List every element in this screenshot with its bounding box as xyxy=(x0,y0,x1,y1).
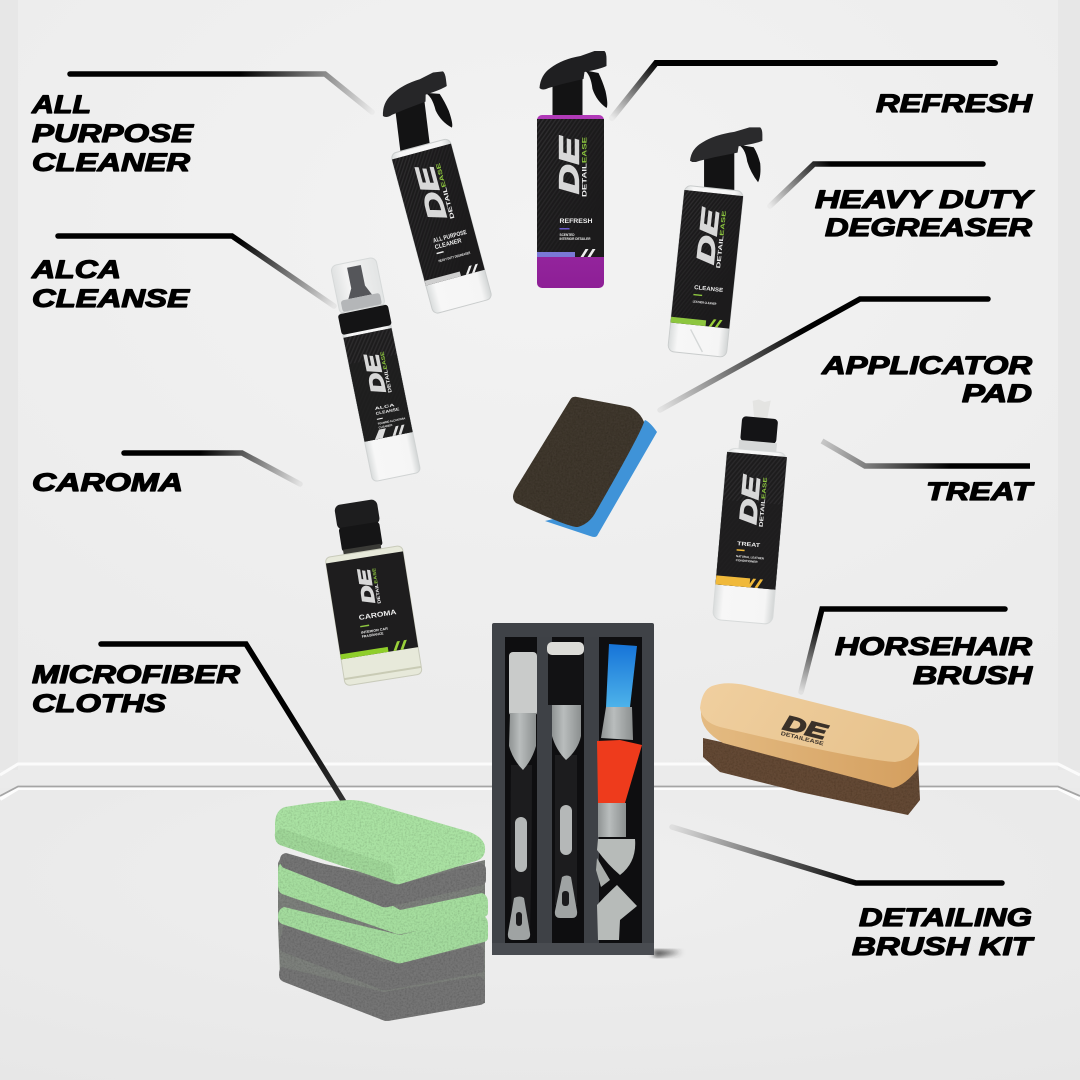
label: heavy duty degreaser: DEGREASER xyxy=(825,214,1032,242)
bottle body: FOAMING ALCANTARA xyxy=(377,416,406,426)
icon: applicator pad xyxy=(513,397,657,537)
icon: spray trigger xyxy=(378,71,455,159)
arrow: horsehair brush leader xyxy=(801,609,1005,692)
label: horsehair brush xyxy=(835,633,1033,690)
bottle body: DETAILEASE xyxy=(582,136,588,197)
cloth: green top xyxy=(275,800,485,884)
bottle body: DETAILEASE xyxy=(716,210,728,269)
label: heavy duty degreaser: HEAVY DUTY xyxy=(815,186,1035,214)
bottle body: DETAILEASE xyxy=(759,477,769,527)
label: alca cleanse: ALCA xyxy=(31,256,121,284)
label: detailing brush kit: BRUSH KIT xyxy=(852,933,1036,961)
bottle body: INTERIOR CAR xyxy=(361,627,389,635)
bottle body: DETAILEASE xyxy=(371,568,382,604)
bottle body: CAROMA xyxy=(358,609,397,622)
arrow: all purpose cleaner leader xyxy=(70,74,372,112)
bottle body xyxy=(668,185,744,357)
bottle body: DETAILEASE xyxy=(379,350,394,393)
bottle body: DE xyxy=(354,567,379,605)
brush three xyxy=(596,644,642,940)
cloth underlay xyxy=(278,855,485,1021)
cap xyxy=(334,499,384,556)
arrow: microfiber cloths leader xyxy=(101,644,344,802)
label: applicator pad: PAD xyxy=(962,380,1032,408)
arrow: applicator pad leader xyxy=(660,299,988,410)
bottle body: NATURAL LEATHER xyxy=(736,554,765,561)
arrow: heavy duty degreaser leader xyxy=(770,164,983,206)
bottle body: CLEANER xyxy=(434,238,463,251)
icon: foam pump dome xyxy=(330,257,385,315)
bottle: alca cleanse xyxy=(328,256,422,482)
bottle body xyxy=(391,138,492,314)
bottle: caroma xyxy=(317,496,422,686)
label: all purpose cleaner xyxy=(31,91,195,177)
label: detailing brush kit: DETAILING xyxy=(859,904,1032,932)
icon: spray trigger xyxy=(690,127,762,198)
cloth: grey fifth xyxy=(280,853,486,907)
bottle body: DE xyxy=(735,474,766,525)
cloth: green fourth xyxy=(278,863,488,934)
icon: microfiber cloths xyxy=(275,800,488,1021)
brush one xyxy=(508,652,537,940)
label: all purpose cleaner: PURPOSE xyxy=(32,120,195,148)
label: horsehair brush: BRUSH xyxy=(913,662,1033,690)
bottle body: CLEANER xyxy=(378,423,393,430)
brush two xyxy=(547,642,584,918)
icon: detailing brush kit xyxy=(492,623,654,955)
label: alca cleanse: CLEANSE xyxy=(32,285,191,313)
bottle body: DE xyxy=(361,351,390,395)
label: refresh: REFRESH xyxy=(876,90,1033,118)
bottle body: DE xyxy=(692,207,725,265)
brush logo: DETAILEASE xyxy=(780,731,825,748)
cap and nozzle xyxy=(738,398,781,453)
bottle body: SCENTED xyxy=(560,233,575,237)
bottle body: ALCA xyxy=(374,402,395,411)
arrow: treat leader xyxy=(822,441,1030,466)
brush logo: DE xyxy=(781,712,830,745)
shadow under kit xyxy=(652,950,682,957)
arrow: detailing brush kit leader xyxy=(672,827,1002,883)
bottle: treat xyxy=(712,397,792,624)
bottle body: CLEANSE xyxy=(375,406,400,416)
bottle body: FRAGRANCE xyxy=(362,631,385,639)
cloth: grey bottom xyxy=(279,967,485,1021)
bottle body: TREAT xyxy=(737,541,761,549)
bottle body: INTERIOR DETAILER xyxy=(560,237,591,241)
label: heavy duty degreaser xyxy=(815,186,1035,242)
brush logo xyxy=(780,712,830,748)
label: all purpose cleaner: CLEANER xyxy=(32,149,190,177)
bottle body: DETAILEASE xyxy=(436,162,456,219)
label: applicator pad xyxy=(821,352,1032,408)
bottle body xyxy=(338,303,422,482)
label: horsehair brush: HORSEHAIR xyxy=(835,633,1032,661)
icon: horsehair brush xyxy=(700,683,920,815)
label: all purpose cleaner: ALL xyxy=(31,91,91,119)
bottle body: DE xyxy=(554,135,584,194)
cloth: grey second xyxy=(279,925,484,990)
arrow: refresh leader xyxy=(612,63,995,118)
label: applicator pad: APPLICATOR xyxy=(821,352,1032,380)
icon: spray trigger xyxy=(540,51,607,119)
bottle body xyxy=(537,115,604,288)
cloth: green third xyxy=(278,907,488,963)
bottle body: DE xyxy=(409,161,452,223)
label: microfiber cloths: CLOTHS xyxy=(32,690,166,718)
label: microfiber cloths: MICROFIBER xyxy=(32,661,240,689)
bottle: heavy duty degreaser (cleanse) xyxy=(668,127,762,357)
bottle body: ALL PURPOSE xyxy=(433,230,468,245)
bottle body xyxy=(325,545,422,686)
bottle body xyxy=(712,448,787,624)
label: caroma: CAROMA xyxy=(32,469,183,497)
arrow: caroma leader xyxy=(124,453,300,484)
bottle body: REFRESH xyxy=(560,219,592,225)
bottle body: HEAVY DUTY DEGREASER xyxy=(438,251,471,263)
label: treat: TREAT xyxy=(926,478,1036,506)
label: alca cleanse xyxy=(31,256,191,313)
bottle: all purpose cleaner xyxy=(378,71,492,314)
label: microfiber cloths xyxy=(32,661,240,718)
label: detailing brush kit xyxy=(852,904,1036,961)
bottle body: CONDITIONER xyxy=(736,558,759,564)
bottle: refresh xyxy=(537,51,607,288)
arrow: alca cleanse leader xyxy=(58,236,334,306)
bottle body: CLEANSE xyxy=(694,285,724,294)
bottle body: LEATHER CLEANER xyxy=(692,299,717,306)
